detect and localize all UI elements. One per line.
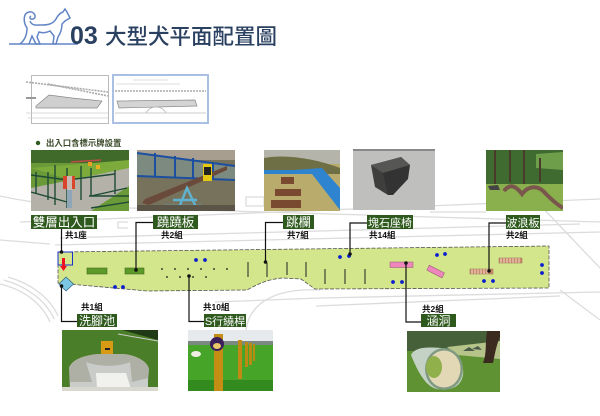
leader: seesaw [134,222,153,272]
photo: hurdles [264,150,340,211]
counts: 共2組 [161,230,183,240]
label: culvert [421,314,456,328]
photo: foot wash pool [62,330,158,391]
leader: foot wash [60,284,77,322]
culverts [390,262,444,278]
stone seats [113,252,544,289]
counts: 共1座 [65,230,87,240]
icon: dog outline [9,9,78,44]
leader: culvert [404,261,421,322]
leader: entrance [60,229,63,254]
slalom poles [161,268,228,278]
leader: stone seats [348,223,367,256]
seesaw marks [87,268,144,274]
title: 03 [70,22,98,50]
counts: 共2組 [506,230,528,240]
leader: slalom [187,274,204,322]
key map: highlighted section [113,75,208,123]
counts: 共7組 [287,230,309,240]
label: slalom poles: S行繞桿 [205,314,245,328]
leader: hurdles [264,222,283,264]
counts: 共2組 [422,304,444,314]
photo: seesaw [137,150,235,211]
counts: 共10組 [203,302,230,312]
label: hurdles: 跳欄 [286,214,311,230]
photo: slalom poles [188,330,273,391]
counts: 共1組 [81,302,103,312]
label: foot wash: 洗腳池 [79,314,115,328]
label: culvert: 涵洞 [426,314,451,328]
key map: left section [26,76,108,124]
label: seesaw: 蹺蹺板 [157,216,195,230]
title: 大型犬平面配置圖 [105,25,277,49]
label: stone seats: 塊石座椅 [368,216,412,230]
counts [65,230,528,314]
icon: foot wash pool [59,277,74,291]
icon: entrance box [58,252,72,265]
label: wave boards: 波浪板 [506,216,540,230]
wave boards [470,258,522,274]
photo: stone block [353,149,435,210]
park plan: green field [58,246,549,291]
counts: 共14組 [369,230,396,240]
photo: culvert [407,331,500,392]
label: double entrance: 雙層出入口 [33,214,95,230]
hurdles [248,262,365,284]
photo: wave boards [486,150,563,211]
leader: wave boards [487,223,506,273]
section note: 出入口含標示牌設置 [46,138,121,148]
photo: double entrance [31,150,129,211]
icon: red entry arrow [60,258,67,271]
